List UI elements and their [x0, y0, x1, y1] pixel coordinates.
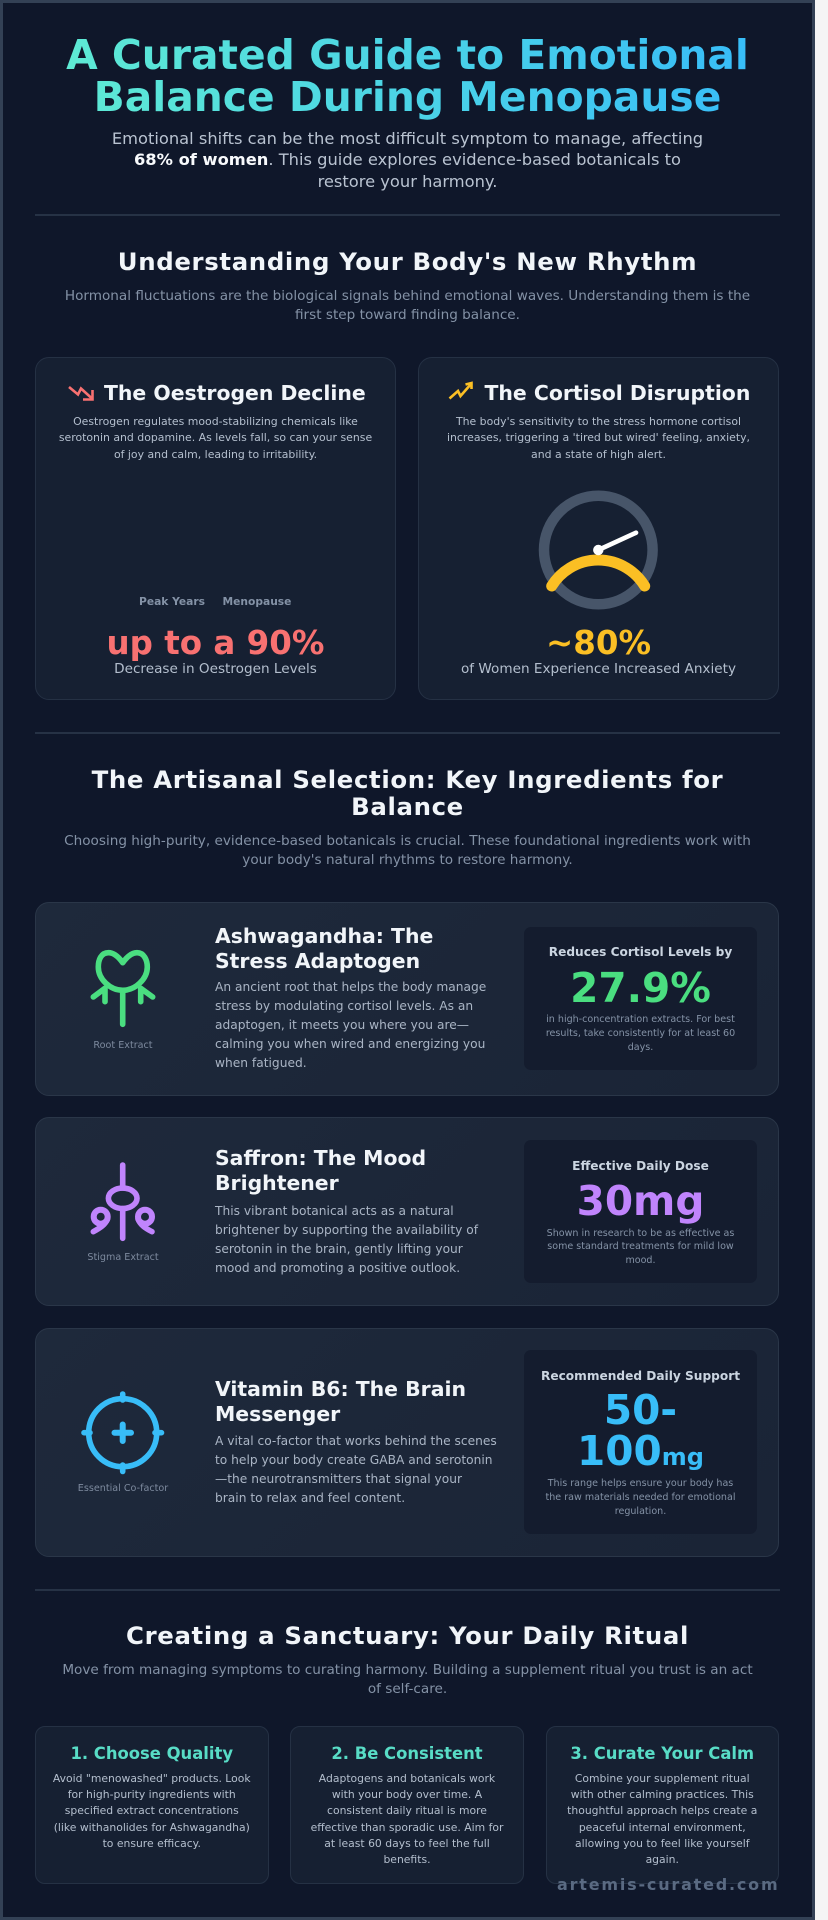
heading: cortisol: The Cortisol Disruption	[484, 380, 750, 404]
text: ashwagandha: calming you when wired and energizing you	[215, 1037, 485, 1051]
stat label: oestrogen: Decrease in Oestrogen Levels	[114, 661, 317, 677]
stat note: cortisol	[546, 1014, 735, 1053]
step 1 text: (like withanolides for Ashwagandha)	[54, 1821, 250, 1834]
step 3 text: with other calming practices. This	[571, 1788, 754, 1801]
text: vitamin b6: —the neurotransmitters that signal your	[215, 1472, 462, 1486]
text: saffron: mood and promoting a positive outlook.	[215, 1260, 460, 1274]
stat note: support: the raw materials needed for emotional	[546, 1492, 735, 1503]
text: cortisol: increases, triggering a 'tired but wired' feeling, anxiety,	[447, 431, 750, 444]
panel: step 2	[290, 1726, 524, 1884]
text: vitamin b6: brain to relax and feel content.	[215, 1490, 405, 1504]
text: ashwagandha: when fatigued.	[215, 1056, 307, 1070]
panel: oestrogen decline	[35, 357, 396, 700]
stat note: cortisol: in high-concentration extracts. For best	[546, 1014, 735, 1025]
panel: ashwagandha	[35, 902, 779, 1096]
icon label: essential co-factor: Essential Co-factor	[78, 1483, 168, 1494]
stat note: dose: some standard treatments for mild low	[547, 1241, 734, 1252]
heading: saffron: Brightener	[215, 1171, 339, 1195]
intro: sanctuary	[62, 1662, 753, 1697]
text: cortisol: and a state of high alert.	[531, 448, 666, 461]
step 1 text	[53, 1772, 251, 1850]
heading: ashwagandha: Ashwagandha: The	[215, 924, 433, 948]
heading: saffron	[215, 1146, 426, 1195]
step 1 text: Avoid "menowashed" products. Look	[53, 1772, 251, 1785]
text: ashwagandha: adaptogen, it meets you where you are—	[215, 1018, 469, 1032]
subtitle: Emotional shifts can be the most difficult symptom to manage, affecting	[112, 129, 703, 148]
subtitle: restore your harmony.	[318, 172, 497, 191]
step 3 text: peaceful internal environment,	[579, 1821, 746, 1834]
intro: artisanal selection: Choosing high-purity, evidence-based botanicals is crucial. These foundational ingredients work with	[64, 833, 751, 849]
icon label: stigma extract: Stigma Extract	[87, 1252, 159, 1263]
stat note: dose	[547, 1228, 734, 1266]
stat: 80 percent: ~80%	[546, 624, 651, 662]
panel: saffron	[35, 1117, 779, 1306]
watermark: artemis-curated.com	[557, 1875, 779, 1894]
title: A Curated Guide to Emotional	[66, 31, 749, 79]
subtitle	[112, 129, 703, 191]
step 3 text: Combine your supplement ritual	[575, 1772, 750, 1785]
step 3 text	[567, 1772, 757, 1866]
text: saffron	[214, 1204, 478, 1274]
heading: ashwagandha	[215, 924, 433, 972]
intro: artisanal selection: your body's natural rhythms to restore harmony.	[242, 852, 573, 868]
icon: vitamin b6	[81, 1391, 164, 1474]
stat title: dose: Effective Daily Dose	[572, 1158, 709, 1172]
text: cortisol: The body's sensitivity to the stress hormone cortisol	[456, 415, 741, 428]
stat note: dose: mood.	[625, 1255, 656, 1266]
stat note: support	[546, 1478, 735, 1517]
icon: ashwagandha root	[90, 950, 156, 1028]
stat value: 27.9 percent: 27.9%	[570, 964, 711, 1012]
text: oestrogen: serotonin and dopamine. As levels fall, so can your sense	[59, 431, 372, 444]
intro: sanctuary: of self-care.	[368, 1681, 447, 1697]
stat box: b6 support	[524, 1350, 757, 1534]
chart label: menopause: Menopause	[222, 595, 291, 608]
intro: understanding	[65, 288, 750, 323]
text: vitamin b6: A vital co-factor that works behind the scenes	[215, 1434, 497, 1448]
step 3 text: allowing you to feel like yourself	[575, 1837, 750, 1850]
gauge	[538, 490, 658, 610]
stat note: dose: Shown in research to be as effective as	[547, 1228, 734, 1239]
step 3 heading: 3. Curate Your Calm	[570, 1744, 754, 1762]
step 2 text: benefits.	[383, 1853, 431, 1866]
text: saffron: brightener by supporting the availability of	[215, 1222, 478, 1236]
heading: sanctuary: Creating a Sanctuary: Your Daily Ritual	[126, 1621, 689, 1650]
panel: step 1	[35, 1726, 268, 1884]
step 2 text	[311, 1772, 504, 1866]
icon: trend up	[448, 381, 473, 400]
intro: artisanal selection	[64, 833, 751, 868]
subtitle: 68% of women. This guide explores evidence-based botanicals to	[134, 150, 681, 169]
stat note: support: This range helps ensure your body has	[548, 1478, 733, 1489]
heading: vitamin b6	[215, 1377, 466, 1426]
stat value: 30mg: 30mg	[577, 1177, 704, 1225]
intro: sanctuary: Move from managing symptoms to curating harmony. Building a supplement ritual you trust is an act	[62, 1662, 753, 1678]
stat box: cortisol reduction	[524, 927, 757, 1070]
text: saffron: This vibrant botanical acts as a natural	[215, 1204, 454, 1218]
step 1 text: specified extract concentrations	[65, 1804, 239, 1817]
stat value: 50-100mg: 50-	[604, 1386, 677, 1434]
text: oestrogen: Oestrogen regulates mood-stabilizing chemicals like	[73, 415, 358, 428]
icon: trend down	[68, 386, 94, 401]
step 2 text: Adaptogens and botanicals work	[319, 1772, 495, 1785]
heading: artisanal selection	[92, 765, 723, 821]
chart label: peak years: Peak Years	[139, 595, 205, 608]
panel: cortisol disruption	[418, 357, 779, 700]
step 2 text: at least 60 days to feel the full	[324, 1837, 490, 1850]
icon label: root extract: Root Extract	[93, 1040, 153, 1050]
step 2 text: consistent daily ritual is more	[327, 1804, 487, 1817]
stat box: saffron dose	[524, 1140, 757, 1283]
text: vitamin b6	[215, 1434, 497, 1504]
heading: understanding: Understanding Your Body's New Rhythm	[118, 247, 697, 276]
step 3 text: thoughtful approach helps create a	[567, 1804, 757, 1817]
step 2 text: with your body over time. A	[332, 1788, 482, 1801]
heading: saffron: Saffron: The Mood	[215, 1146, 426, 1170]
stat note: support: regulation.	[615, 1506, 666, 1517]
intro: understanding: Hormonal fluctuations are the biological signals behind emotional waves. Understanding them is the	[65, 288, 750, 304]
step 2 heading: 2. Be Consistent	[331, 1744, 483, 1762]
heading: vitamin b6: Messenger	[215, 1402, 340, 1426]
heading: artisanal selection: Balance	[351, 792, 464, 821]
panel: vitamin b6	[35, 1328, 779, 1557]
stat title: support: Recommended Daily Support	[541, 1368, 740, 1382]
text: cortisol	[447, 415, 750, 461]
icon: saffron stigma	[90, 1162, 155, 1242]
step 1 text: to ensure efficacy.	[103, 1837, 201, 1850]
stat: 90 percent: up to a 90%	[107, 624, 324, 662]
step 3 text: again.	[646, 1853, 679, 1866]
title: Balance During Menopause	[94, 72, 721, 120]
stat label: anxiety: of Women Experience Increased Anxiety	[461, 661, 736, 677]
text: vitamin b6: to help your body create GABA and serotonin	[215, 1452, 493, 1466]
intro: understanding: first step toward finding balance.	[295, 307, 520, 323]
stat note: cortisol: days.	[628, 1042, 653, 1053]
step 1 text: for high-purity ingredients with	[68, 1788, 236, 1801]
text: ashwagandha: An ancient root that helps the body manage	[215, 980, 486, 994]
step 1 heading: 1. Choose Quality	[70, 1744, 233, 1762]
title	[66, 31, 749, 120]
heading: vitamin b6: Vitamin B6: The Brain	[215, 1377, 466, 1401]
stat value: 50-100mg	[577, 1386, 704, 1475]
text: saffron: serotonin in the brain, gently lifting your	[215, 1242, 463, 1256]
stat note: cortisol: results, take consistently for at least 60	[546, 1028, 735, 1039]
text: oestrogen	[59, 415, 372, 461]
text: ashwagandha	[215, 980, 486, 1070]
stat title: cortisol: Reduces Cortisol Levels by	[549, 945, 732, 959]
heading: oestrogen: The Oestrogen Decline	[104, 380, 366, 404]
panel: step 3	[546, 1726, 779, 1884]
step 2 text: effective than sporadic use. Aim for	[311, 1821, 503, 1834]
stat value: 50-100mg: 100mg	[577, 1427, 704, 1475]
text: oestrogen: of joy and calm, leading to irritability.	[114, 448, 317, 461]
heading: artisanal selection: The Artisanal Selection: Key Ingredients for	[92, 765, 723, 794]
text: ashwagandha: stress by modulating cortisol levels. As an	[215, 999, 473, 1013]
heading: ashwagandha: Stress Adaptogen	[215, 948, 420, 972]
